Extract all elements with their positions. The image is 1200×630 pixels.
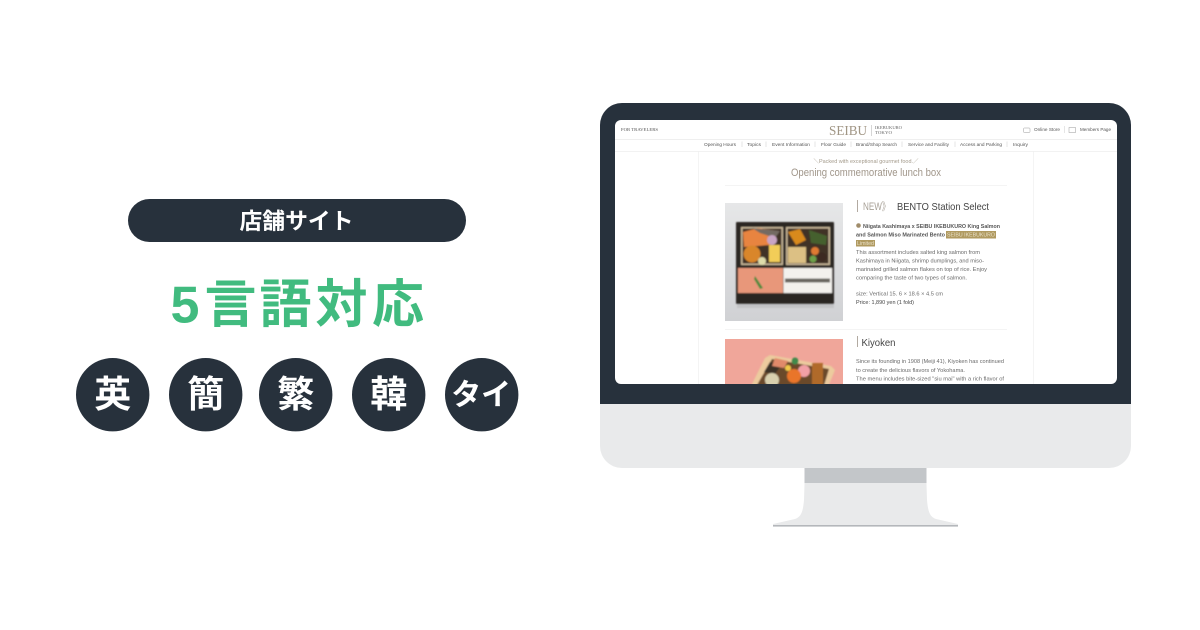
circle: English: 英 [94, 374, 131, 415]
photo: Kiyoken bento [725, 339, 843, 384]
navigation: Floor Guide [821, 142, 846, 147]
screen: website [615, 120, 1117, 392]
product 1 text: NEW》 [863, 200, 890, 213]
monitor stand [773, 468, 958, 527]
language circles [76, 358, 518, 431]
product 1 text: and Salmon Miso Marinated Bento [856, 232, 946, 238]
product 1 text: SEIBU IKEBUKURO [947, 232, 995, 238]
navigation: Opening Hours [704, 142, 737, 147]
circle: Korean: 韓 [370, 374, 407, 415]
badge: store site [128, 199, 466, 242]
product 2 text: Since its founding in 1908 (Meiji 41), Kiyoken has continued [856, 359, 1004, 365]
product 1 text: Kashimaya in Niigata, shrimp dumplings, and miso- [856, 258, 984, 264]
site header [621, 125, 1111, 136]
navigation [704, 142, 1029, 147]
circle: Thai: タイ [451, 379, 511, 412]
photo: salmon bento [725, 203, 843, 321]
product 2 text: to create the delicious flavors of Yokohama. [856, 368, 965, 374]
product 1 text: BENTO Station Select [897, 201, 989, 213]
navigation: Access and Parking [960, 142, 1002, 147]
navigation: Brand/Shop Search [856, 142, 897, 147]
circle: Korean [352, 358, 425, 431]
navigation: Event Information [772, 142, 810, 147]
site header: Online Store [1034, 127, 1060, 132]
product 1 text: This assortment includes salted king salmon from [856, 250, 981, 256]
circle: Traditional Chinese: 繁 [277, 374, 314, 415]
product 2 text: Kiyoken [862, 337, 896, 349]
product 2 text: The menu includes bite-sized "siu mai" with a rich flavor of [856, 376, 1005, 382]
product 1 text: Niigata Kashimaya x SEIBU IKEBUKURO King Salmon [863, 224, 1001, 230]
navigation: Inquiry [1013, 142, 1029, 147]
page subtitle: ＼Packed with exceptional gourmet food.／ [814, 158, 919, 165]
circle: Traditional Chinese [259, 358, 332, 431]
navigation: Service and Facility [908, 142, 950, 147]
site header: TOKYO [875, 130, 892, 135]
site header: IKEBUKURO [875, 125, 902, 130]
circle: Thai [445, 358, 518, 431]
monitor illustration [600, 103, 1131, 527]
circle: Simplified Chinese [169, 358, 242, 431]
monitor body [600, 103, 1131, 468]
product 1 text: comparing the taste of two types of salmon. [856, 276, 967, 282]
product 1 text: Price: 1,890 yen (1 fold) [856, 300, 914, 306]
site header: Members Page [1080, 127, 1111, 132]
site header: FOR TRAVELERS [621, 127, 658, 132]
badge: store site: 店舗サイト [240, 208, 353, 234]
product 2 text [856, 336, 1005, 382]
page title: Opening commemorative lunch box [791, 167, 942, 179]
product 1 text: size: Vertical 15. 6 × 18.6 × 4.5 cm [856, 292, 944, 298]
circle: Simplified Chinese: 簡 [187, 374, 224, 415]
heading: 5 languages supported: 5言語対応 [170, 276, 424, 334]
circle: English [76, 358, 149, 431]
site header: SEIBU [829, 123, 867, 138]
product 1 text: Limited [857, 241, 874, 247]
navigation: Topics [747, 142, 762, 147]
product 1 text: marinated grilled salmon flakes on top of rice. Enjoy [856, 267, 987, 273]
product 1 text [856, 200, 1001, 306]
